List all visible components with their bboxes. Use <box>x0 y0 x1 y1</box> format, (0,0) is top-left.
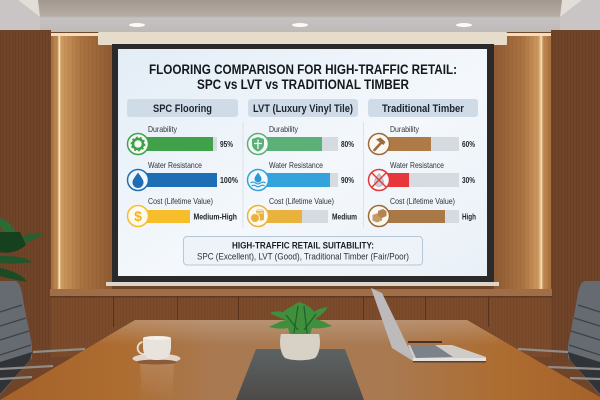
icon: water drop over waves <box>248 170 268 190</box>
left chair <box>0 281 85 395</box>
row: LVT water resistance 90%: 90% <box>341 175 354 185</box>
summary box <box>184 236 422 265</box>
laptop <box>371 288 486 362</box>
column dividers <box>243 122 364 228</box>
infographic panel <box>118 49 487 276</box>
column: LVT <box>248 99 358 226</box>
screen frame <box>112 44 494 283</box>
title: SPC vs LVT vs TRADITIONAL TIMBER <box>197 77 409 92</box>
row: SPC water resistance 100% <box>145 160 238 187</box>
ceiling downlights <box>129 23 472 27</box>
icon: timber blocks <box>368 206 390 226</box>
summary box: HIGH-TRAFFIC RETAIL SUITABILITY: <box>232 240 374 252</box>
row: LVT water resistance 90%: Water Resistance <box>269 160 323 170</box>
table plant in pot <box>269 302 332 360</box>
row: Timber cost high <box>387 196 476 223</box>
screen bottom bar <box>106 282 499 286</box>
icon: coin stack <box>248 206 268 226</box>
heading: LVT (Luxury Vinyl Tile): LVT (Luxury Vinyl Tile) <box>253 103 353 115</box>
table mat <box>236 349 364 400</box>
row: LVT durability 80%: 80% <box>341 139 354 149</box>
icon: hammer <box>368 134 390 154</box>
column: Traditional Timber <box>368 99 478 226</box>
title: FLOORING COMPARISON FOR HIGH-TRAFFIC RETAIL: <box>149 62 457 77</box>
heading: SPC Flooring: SPC Flooring <box>153 103 212 115</box>
row: Timber durability 60% <box>387 124 475 151</box>
right chair <box>518 281 600 395</box>
row: LVT cost medium: Medium <box>332 212 357 222</box>
icon: green shield <box>248 134 268 154</box>
row: LVT durability 80%: Durability <box>269 124 299 134</box>
row: Timber durability 60%: Durability <box>390 124 420 134</box>
icon: green gear <box>128 134 148 154</box>
row: Timber water resistance 30%: Water Resistance <box>390 160 444 170</box>
icon: blue water drop <box>128 170 148 190</box>
icon: crossed-out water drop <box>368 170 390 190</box>
row: SPC cost medium-high: Medium-High <box>194 212 237 222</box>
row: SPC cost medium-high <box>145 196 237 223</box>
row: SPC durability 95%: 95% <box>220 139 233 149</box>
row: SPC cost medium-high: Cost (Lifetime Value) <box>148 196 213 206</box>
row: LVT cost medium <box>265 196 357 223</box>
left wall plant <box>0 218 43 282</box>
row: LVT water resistance 90% <box>265 160 354 187</box>
row: Timber durability 60%: 60% <box>462 139 475 149</box>
summary box: SPC (Excellent), LVT (Good), Traditional Timber (Fair/Poor) <box>197 252 409 262</box>
conference table <box>0 320 600 400</box>
coffee cup and saucer <box>132 336 180 400</box>
row: LVT cost medium: Cost (Lifetime Value) <box>269 196 334 206</box>
column: SPC Flooring <box>127 99 238 226</box>
row: SPC water resistance 100%: 100% <box>220 175 238 185</box>
projector roller case <box>98 32 507 45</box>
row: Timber cost high: Cost (Lifetime Value) <box>390 196 455 206</box>
row: SPC water resistance 100%: Water Resistance <box>148 160 202 170</box>
row: SPC durability 95% <box>145 124 233 151</box>
heading: Traditional Timber: Traditional Timber <box>382 103 465 115</box>
row: Timber cost high: High <box>462 212 476 222</box>
row: Timber water resistance 30% <box>387 160 475 187</box>
row: Timber water resistance 30%: 30% <box>462 175 475 185</box>
icon: yellow dollar: $ <box>134 208 142 224</box>
title <box>149 62 457 92</box>
row: SPC durability 95%: Durability <box>148 124 178 134</box>
row: LVT durability 80% <box>265 124 354 151</box>
